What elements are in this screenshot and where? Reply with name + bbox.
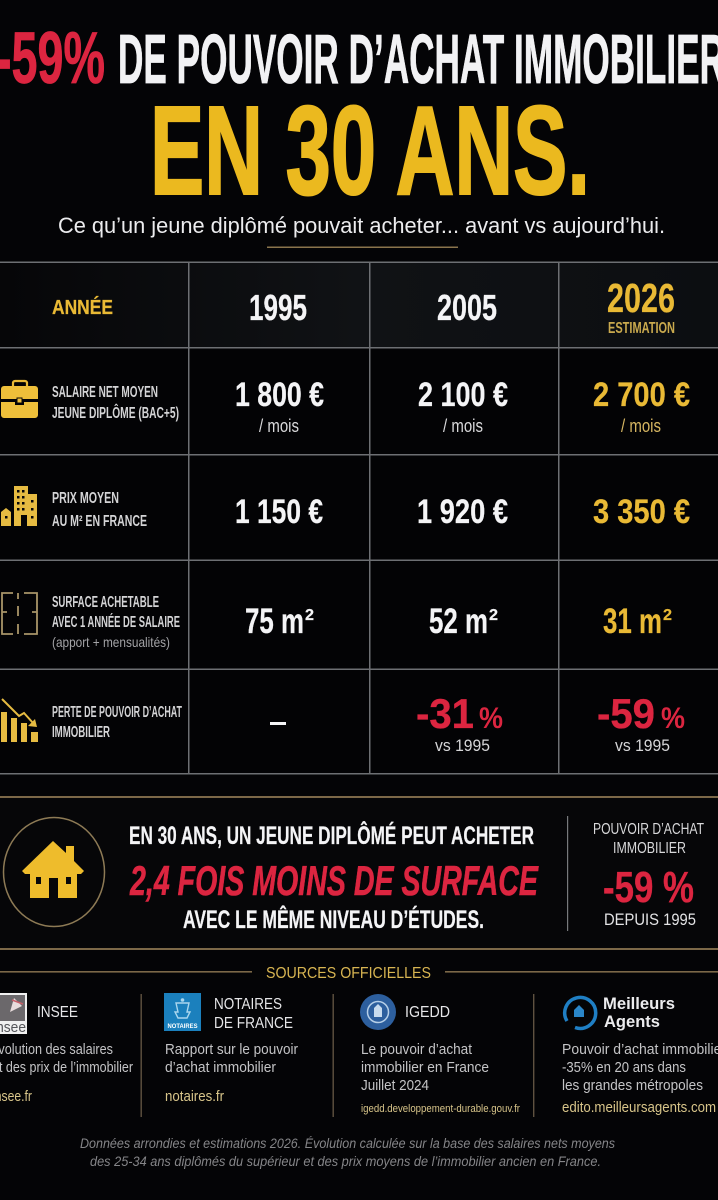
banner stat: DEPUIS 1995 <box>604 910 696 929</box>
footnote: Données arrondies et estimations 2026. Évolution calculée sur la base des salaires nets moyens <box>80 1136 615 1151</box>
row: surface: AVEC 1 ANNÉE DE SALAIRE <box>52 614 180 631</box>
table header row: ANNÉE <box>52 296 113 319</box>
source: Notaires de France: DE FRANCE <box>214 1015 293 1032</box>
table header row: 2005 <box>437 287 497 328</box>
banner stat: -59 % <box>603 863 694 912</box>
row: prix: PRIX MOYEN <box>52 490 119 507</box>
icon: floor plan <box>2 593 37 634</box>
row: salaire: SALAIRE NET MOYEN <box>52 384 158 401</box>
table header row: ESTIMATION <box>608 320 675 337</box>
row: prix: 1 920 € <box>417 493 508 531</box>
row: surface <box>2 593 672 650</box>
source: IGEDD: Le pouvoir d’achat <box>361 1041 473 1058</box>
banner message <box>129 820 539 934</box>
source: Meilleurs Agents: les grandes métropoles <box>562 1077 703 1094</box>
icon: falling chart <box>1 699 38 742</box>
subtitle: Ce qu’un jeune diplômé pouvait acheter... avant vs aujourd’hui. <box>58 213 665 238</box>
row: salaire: / mois <box>259 416 299 436</box>
row: prix: AU M² EN FRANCE <box>52 513 147 530</box>
source: Meilleurs Agents <box>562 994 718 1116</box>
row: perte: -31 <box>416 690 474 737</box>
row: prix <box>1 486 690 531</box>
banner message: AVEC LE MÊME NIVEAU D’ÉTUDES. <box>183 904 484 934</box>
row: surface: 2 <box>489 607 498 624</box>
comparison table <box>0 262 718 774</box>
source: INSEE: INSEE <box>37 1004 78 1021</box>
row: perte: PERTE DE POUVOIR D’ACHAT <box>52 704 182 721</box>
source: Notaires de France: d’achat immobilier <box>165 1059 276 1076</box>
sources heading: SOURCES OFFICIELLES <box>266 965 431 982</box>
logo: igedd <box>360 994 396 1030</box>
icon: house in circle <box>4 818 104 926</box>
row: salaire: / mois <box>443 416 483 436</box>
footnote <box>80 1136 615 1169</box>
source: Meilleurs Agents: -35% en 20 ans dans <box>562 1059 686 1076</box>
source: Notaires de France: Rapport sur le pouvoir <box>165 1041 298 1058</box>
banner message: EN 30 ANS, UN JEUNE DIPLÔMÉ PEUT ACHETER <box>129 820 534 850</box>
row: perte: vs 1995 <box>615 736 670 755</box>
row: perte <box>1 690 685 755</box>
row: surface: 52 m <box>429 602 488 641</box>
table header row: 1995 <box>249 287 307 328</box>
row: salaire: 2 100 € <box>418 376 508 414</box>
row: salaire: 1 800 € <box>235 376 324 414</box>
source: Meilleurs Agents: Meilleurs <box>603 994 675 1013</box>
row: salaire: / mois <box>621 416 661 436</box>
logo: notaires: NOTAIRES <box>168 1023 198 1030</box>
icon: briefcase <box>1 381 38 418</box>
row: surface: 31 m <box>603 602 662 641</box>
logo: meilleurs agents <box>565 997 596 1028</box>
banner <box>0 796 718 950</box>
row: prix: 3 350 € <box>593 493 690 531</box>
source: Notaires de France: NOTAIRES <box>214 996 282 1013</box>
row: surface: SURFACE ACHETABLE <box>52 594 159 611</box>
logo: insee <box>0 993 27 1036</box>
row: perte: -59 <box>597 690 655 737</box>
row: perte: % <box>479 702 503 735</box>
source: Notaires de France: notaires.fr <box>165 1088 224 1105</box>
table header row: 2026 <box>607 275 675 321</box>
row: surface: 2 <box>305 607 314 624</box>
source: INSEE <box>0 993 133 1105</box>
table header row <box>52 275 675 337</box>
row: prix: 1 150 € <box>235 493 323 531</box>
title line one: red figure: -59% <box>0 18 105 99</box>
source: IGEDD: immobilier en France <box>361 1059 489 1076</box>
row: surface: (apport + mensualités) <box>52 634 170 650</box>
source: Meilleurs Agents: Agents <box>604 1012 660 1031</box>
banner stat: IMMOBILIER <box>613 840 686 857</box>
icon: buildings <box>1 486 37 526</box>
row: surface: 75 m <box>245 602 304 641</box>
banner message: 2,4 FOIS MOINS DE SURFACE <box>129 857 539 904</box>
source: IGEDD: IGEDD <box>405 1004 450 1021</box>
row: salaire <box>1 376 690 436</box>
source: IGEDD: igedd.developpement-durable.gouv.fr <box>361 1103 520 1115</box>
title <box>0 18 718 221</box>
source: Notaires de France <box>164 993 298 1105</box>
row: surface: 2 <box>663 607 672 624</box>
footnote: des 25-34 ans diplômés du supérieur et des prix moyens de l’immobilier ancien en France. <box>90 1154 601 1169</box>
source: IGEDD: Juillet 2024 <box>361 1077 429 1094</box>
row: perte: IMMOBILIER <box>52 724 110 741</box>
banner stat <box>593 821 704 929</box>
row: salaire: 2 700 € <box>593 376 690 414</box>
source: IGEDD <box>360 994 520 1115</box>
row: salaire: JEUNE DIPLÔME (BAC+5) <box>52 404 179 422</box>
row: perte: vs 1995 <box>435 736 490 755</box>
row: perte: % <box>661 702 685 735</box>
